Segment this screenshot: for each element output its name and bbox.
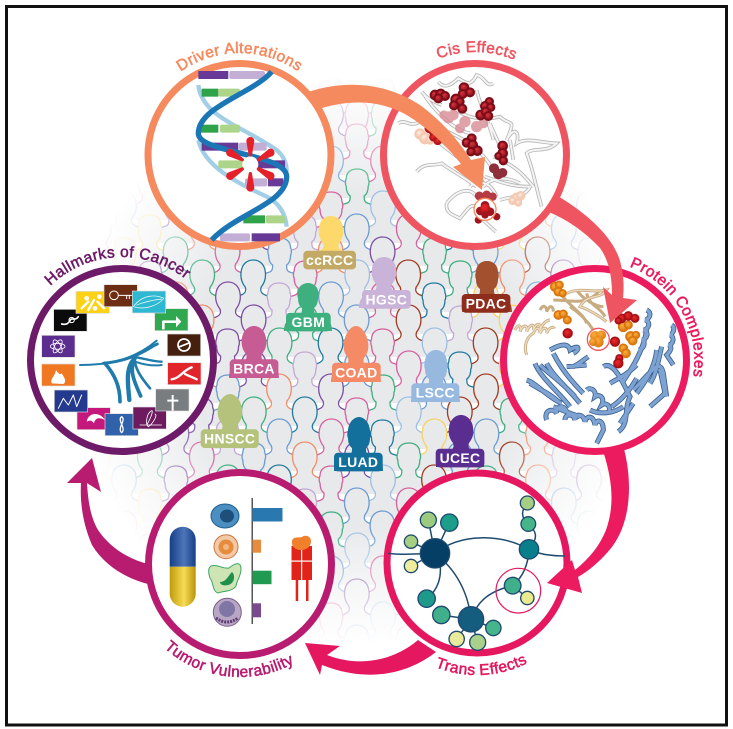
label: Hallmarks of Cancer: Hallmarks of Cancer [44,246,191,286]
cancer type: HGSC: HGSC [365,291,407,307]
icon: DNA helix with mutation burst [198,71,287,241]
label: Tumor Vulnerability: Tumor Vulnerability [166,639,292,678]
cancer type: HNSCC: HNSCC [204,431,255,447]
cancer type: BRCA: BRCA [233,361,275,377]
hallmark tiles [42,285,201,436]
highlighted residue ring [474,198,496,220]
cancer type: UCEC: UCEC [440,450,480,466]
cancer type: GBM [284,283,332,331]
cancer type: HGSC [359,257,411,309]
cancer type: BRCA [229,326,279,378]
icon: cell types [209,504,241,626]
cancer type: GBM: GBM [292,314,325,330]
panel: Tumor Vulnerability [148,472,332,656]
cancer type: PDAC [462,261,512,313]
bar chart: vulnerability scores [252,498,282,624]
cancer type: LUAD: LUAD [338,454,378,470]
network diagram [388,496,565,650]
panel: Trans Effects [387,473,567,653]
panel: Hallmarks of Cancer [30,268,214,452]
circle: driver panel ring [148,64,331,246]
protein structure with spheres [398,75,557,232]
background crowd of patient silhouettes [100,82,608,637]
panel: Cis Effects [384,64,566,246]
arrow: tumor vulnerability to hallmarks [67,458,148,584]
icon: receptor target [292,536,312,601]
label: Cis Effects: Cis Effects [436,40,516,60]
cancer type: UCEC [436,415,484,467]
label: Protein Complexes: Protein Complexes [630,256,704,377]
cancer type: LSCC [411,350,460,402]
cancer type: LUAD [334,417,383,471]
protein complex structure [515,281,674,443]
cancer type: ccRCC: ccRCC [306,252,353,268]
label: Trans Effects: Trans Effects [438,656,526,676]
panel: Driver Alterations [148,64,331,246]
circle: tumor vulnerability ring [148,472,332,656]
phylogenetic tree [80,341,162,402]
icon: drug capsule [170,527,196,607]
circle: cis panel ring [384,64,566,246]
label: Driver Alterations: Driver Alterations [176,42,302,72]
circle: hallmarks ring [30,268,214,452]
arrow: protein complexes to trans effects [547,449,629,593]
cancer type: COAD: COAD [335,364,378,380]
circle: trans effects ring [387,473,567,653]
arrow: trans effects to tumor vulnerability [305,640,436,675]
cancer type: HNSCC [201,394,259,448]
arrow: cis effects to protein complexes [549,195,637,323]
cancer type: COAD [331,326,381,382]
circle: protein complex ring [504,268,686,452]
panel: Protein Complexes [504,268,686,452]
cancer type: LSCC: LSCC [416,385,455,401]
highlighted interface ring [587,328,609,350]
arrow: driver alterations to cis effects [308,85,485,190]
cancer type: PDAC: PDAC [466,295,506,311]
cancer type: ccRCC [303,216,356,269]
hallmark tile icons [50,291,197,433]
